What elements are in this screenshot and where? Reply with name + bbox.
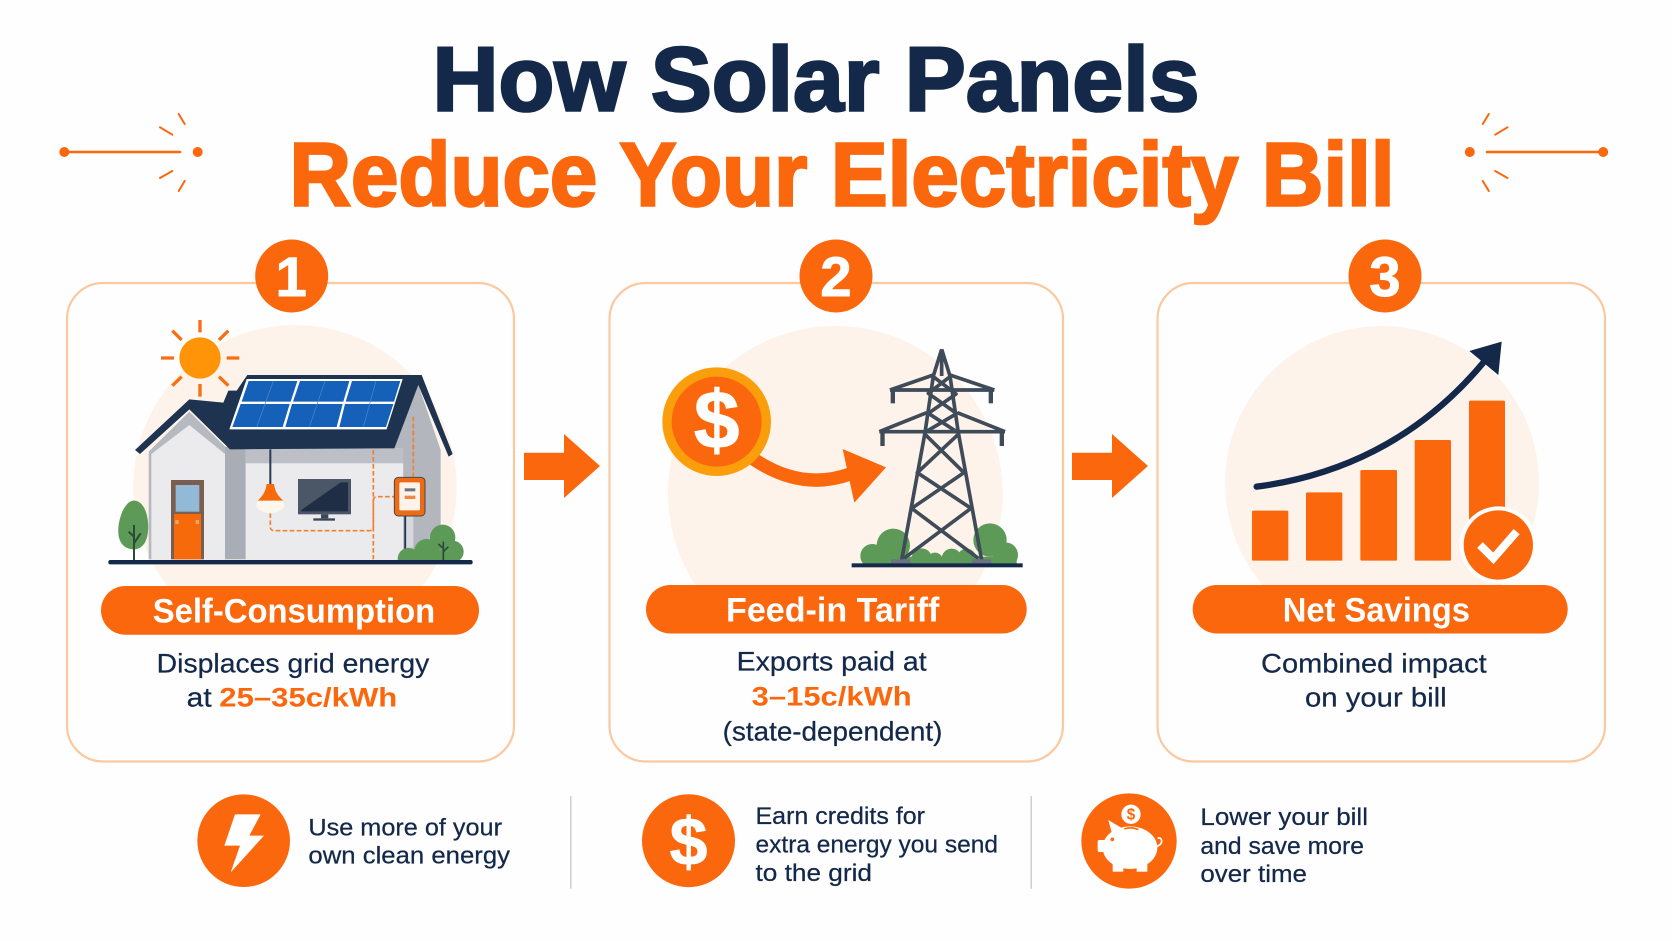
number badge 3 bbox=[1348, 240, 1422, 312]
decorative spark right bbox=[1465, 114, 1608, 191]
text: use more bbox=[308, 814, 511, 870]
ground bbox=[852, 563, 1023, 567]
icon: dollar: $ bbox=[670, 804, 707, 880]
label pill: feed-in tariff bbox=[646, 585, 1027, 634]
flow arrow bbox=[743, 452, 850, 480]
lamp bbox=[269, 449, 271, 484]
coin dollar sign: $ bbox=[694, 375, 740, 466]
icon: lightning bolt bbox=[197, 794, 290, 887]
title: How Solar Panels bbox=[432, 30, 1200, 130]
divider bbox=[570, 796, 572, 889]
text: earn credits: extra energy you send bbox=[756, 832, 998, 859]
text: lower your bill: over time bbox=[1200, 861, 1307, 888]
body text: exports paid: (state-dependent) bbox=[723, 716, 942, 746]
body text: displaces grid energy bbox=[157, 649, 430, 713]
divider bbox=[1030, 796, 1032, 889]
title bbox=[290, 30, 1394, 226]
label pill: net savings: Net Savings bbox=[1283, 592, 1470, 630]
body text: displaces grid energy: at bbox=[187, 683, 212, 713]
tree bbox=[118, 501, 148, 549]
panel: net savings bbox=[1158, 283, 1605, 762]
panel: feed-in tariff bbox=[610, 283, 1063, 762]
icon: piggy bank: $ bbox=[1127, 807, 1136, 824]
icon: piggy bank bbox=[1081, 793, 1177, 889]
benefit: earn credits bbox=[642, 794, 998, 887]
label pill: feed-in tariff: Feed-in Tariff bbox=[726, 592, 940, 630]
tv bbox=[298, 479, 351, 514]
body text: exports paid bbox=[723, 646, 942, 746]
text: lower your bill: and save more bbox=[1200, 833, 1364, 860]
number badge 2: 2 bbox=[820, 245, 852, 308]
solar panel bbox=[229, 379, 403, 429]
walls bbox=[149, 412, 225, 559]
number badge 1 bbox=[255, 240, 328, 312]
label pill: self-consumption bbox=[101, 586, 479, 635]
body text: exports paid: Exports paid at bbox=[737, 646, 927, 676]
body text: combined impact: on your bill bbox=[1305, 682, 1447, 712]
text: use more: own clean energy bbox=[308, 842, 511, 870]
illustration: house with solar panels bbox=[108, 320, 473, 586]
body text: combined impact: Combined impact bbox=[1261, 649, 1487, 679]
roof bbox=[135, 375, 453, 457]
icon: dollar bbox=[642, 794, 735, 887]
wiring bbox=[270, 417, 413, 559]
bar chart with growth arrow bbox=[1225, 326, 1539, 585]
benefit: clean energy bbox=[197, 794, 511, 887]
bushes bbox=[398, 524, 464, 560]
meter bbox=[404, 516, 406, 551]
text: earn credits bbox=[756, 803, 998, 887]
number badge 1: 1 bbox=[276, 245, 307, 308]
label pill: net savings bbox=[1193, 585, 1568, 634]
body text: displaces grid energy: Displaces grid energy bbox=[157, 649, 430, 679]
text: earn credits: to the grid bbox=[756, 860, 872, 887]
door bbox=[171, 480, 204, 559]
body text: exports paid: 3–15c/kWh bbox=[752, 682, 912, 712]
coin bbox=[662, 367, 771, 476]
body text: displaces grid energy: 25–35c/kWh bbox=[219, 683, 397, 713]
text: use more: Use more of your bbox=[308, 814, 502, 842]
label pill: self-consumption: Self-Consumption bbox=[153, 592, 435, 630]
text: lower your bill: Lower your bill bbox=[1200, 804, 1368, 831]
title: Reduce Your Electricity Bill bbox=[290, 126, 1394, 226]
body text: combined impact bbox=[1261, 649, 1487, 712]
illustration: coin, arrow and pylon bbox=[662, 326, 1023, 585]
pylon bbox=[879, 349, 1005, 560]
number badge 3: 3 bbox=[1369, 245, 1401, 308]
arrow 2 to 3 bbox=[1072, 434, 1148, 498]
text: lower your bill bbox=[1200, 804, 1368, 888]
ground bbox=[108, 560, 473, 564]
arrow 1 to 2 bbox=[524, 434, 600, 498]
number badge 2 bbox=[800, 240, 872, 312]
bushes bbox=[860, 523, 1018, 564]
panel: self-consumption bbox=[67, 283, 514, 762]
benefit: lower your bill bbox=[1081, 793, 1368, 889]
text: earn credits: Earn credits for bbox=[756, 803, 925, 830]
decorative spark left bbox=[59, 114, 203, 191]
